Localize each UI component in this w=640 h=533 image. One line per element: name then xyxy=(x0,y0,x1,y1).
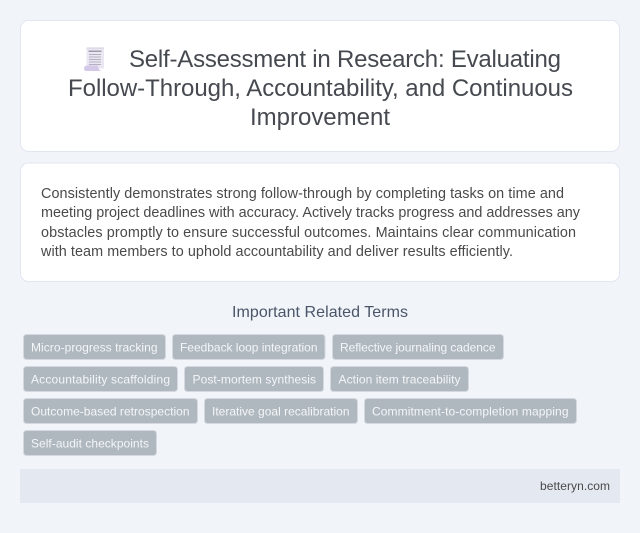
tag xyxy=(24,334,166,360)
tag xyxy=(330,366,468,392)
title: Self-Assessment in Research: Evaluating xyxy=(129,46,561,73)
title xyxy=(68,46,573,131)
tag xyxy=(172,334,325,360)
tag: Commitment-to-completion mapping xyxy=(372,404,568,418)
summary text xyxy=(40,186,581,260)
panel: title card xyxy=(20,20,620,152)
tag xyxy=(332,334,504,360)
tag: Action item traceability xyxy=(338,372,460,386)
tag: Reflective journaling cadence xyxy=(340,340,496,354)
tag: Feedback loop integration xyxy=(180,340,318,354)
heading: important related terms: Important Related Terms xyxy=(232,304,408,321)
tag xyxy=(24,398,198,424)
summary text: meeting project deadlines with accuracy. Actively tracks progress and addresses any xyxy=(41,205,581,221)
footer bar xyxy=(20,469,620,503)
title: Improvement xyxy=(250,104,390,131)
tag xyxy=(204,398,358,424)
icon: document scroll xyxy=(84,48,104,71)
tag xyxy=(24,430,156,456)
tag: Micro-progress tracking xyxy=(31,340,158,354)
panel: summary card xyxy=(20,163,620,282)
tag xyxy=(24,366,178,392)
summary text: obstacles promptly to ensure successful outcomes. Maintains clear communication xyxy=(41,225,576,241)
tag: Accountability scaffolding xyxy=(31,372,170,386)
footer text: betteryn.com xyxy=(540,479,610,493)
tag: Iterative goal recalibration xyxy=(212,404,350,418)
tag: Outcome-based retrospection xyxy=(31,404,190,418)
tag group xyxy=(24,334,576,456)
summary text: Consistently demonstrates strong follow-through by completing tasks on time and xyxy=(41,186,564,202)
tag: Post-mortem synthesis xyxy=(192,372,316,386)
tag: Self-audit checkpoints xyxy=(31,436,149,450)
tag xyxy=(364,398,576,424)
title: Follow-Through, Accountability, and Continuous xyxy=(68,75,573,102)
tag xyxy=(184,366,324,392)
summary text: with team members to uphold accountability and deliver results efficiently. xyxy=(40,244,513,260)
